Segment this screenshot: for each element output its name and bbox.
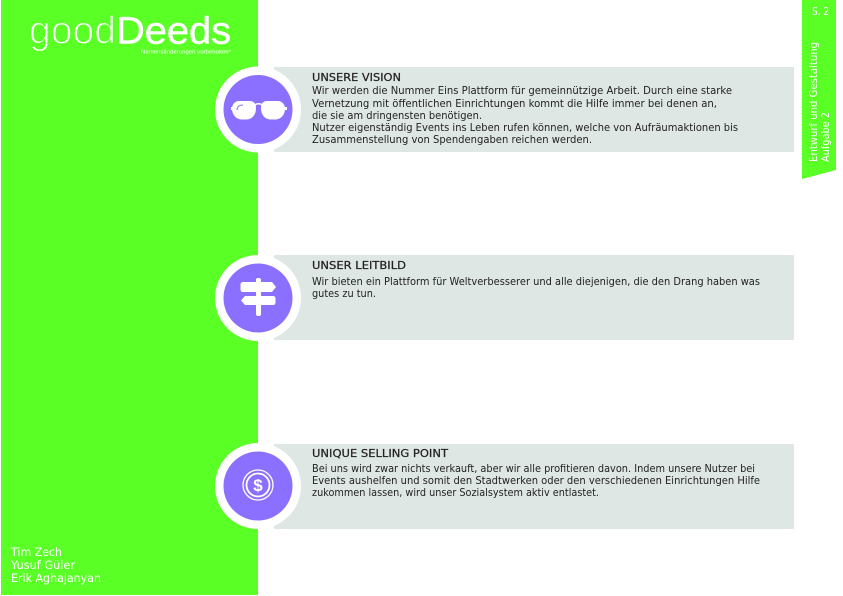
tab text: Entwurf und Gestaltung (807, 42, 820, 162)
text: authors: Tim Zech (10, 545, 62, 559)
text: Unser Leitbild body: gutes zu tun. (312, 287, 376, 300)
text: Unique Selling Point body: Events aushelfen und somit den Stadtwerken oder den verschiedenen Einrichtungen Hilfe (312, 474, 760, 487)
tab text: Aufgabe 2 (819, 112, 832, 162)
tab text (807, 42, 832, 162)
icon: dollar coin badge (215, 443, 301, 529)
logo: goodDeeds: good (29, 10, 116, 52)
heading: Unser Leitbild: UNSER LEITBILD (312, 259, 406, 272)
text: Unser Leitbild body: Wir bieten ein Plattform für Weltverbesserer und alle diejenigen, die den Drang haben was (312, 275, 760, 288)
logo: goodDeeds: Deeds (116, 10, 231, 52)
icon: sunglasses badge (215, 66, 301, 152)
icon: signpost badge (215, 255, 301, 341)
panel: Unsere Vision (274, 67, 794, 152)
text: Unsere Vision body: Zusammenstellung von Spendengaben reichen werden. (312, 133, 592, 146)
logo: goodDeeds (29, 10, 231, 52)
text: Unsere Vision body: Nutzer eigenständig Events ins Leben rufen können, welche von Aufräumaktionen bis (312, 121, 738, 134)
tab: page marker (802, 0, 836, 179)
text: authors (10, 545, 101, 585)
panel: Unique Selling Point (274, 444, 794, 529)
text: authors: Erik Aghajanyan (11, 571, 101, 585)
heading: Unsere Vision: UNSERE VISION (312, 71, 401, 84)
panel: Unser Leitbild (274, 255, 794, 340)
text: Unsere Vision body: Vernetzung mit öffentlichen Einrichtungen kommt die Hilfe immer bei denen an, (312, 97, 717, 110)
text: Unsere Vision body: die sie am dringensten benötigen. (312, 109, 482, 122)
text: Unique Selling Point body: zukommen lassen, wird unser Sozialsystem aktiv entlastet. (312, 486, 599, 499)
text: authors: Yusuf Güler (10, 558, 75, 572)
panel: green sidebar (1, 0, 258, 595)
text: Unique Selling Point body: Bei uns wird zwar nichts verkauft, aber wir alle profitieren davon. Indem unsere Nutzer bei (312, 462, 755, 475)
text: Unique Selling Point body (312, 462, 760, 499)
logo caption: Namensänderungen vorbehalten* (141, 50, 232, 56)
heading: Unique Selling Point: UNIQUE SELLING POINT (312, 447, 448, 460)
text: Unser Leitbild body (312, 275, 760, 300)
icon: dollar coin badge: $ (253, 476, 263, 495)
text: Unsere Vision body: Wir werden die Nummer Eins Plattform für gemeinnützige Arbeit. Durch eine starke (312, 84, 732, 97)
page number: S. 2 (812, 5, 829, 18)
text: Unsere Vision body (312, 84, 738, 146)
